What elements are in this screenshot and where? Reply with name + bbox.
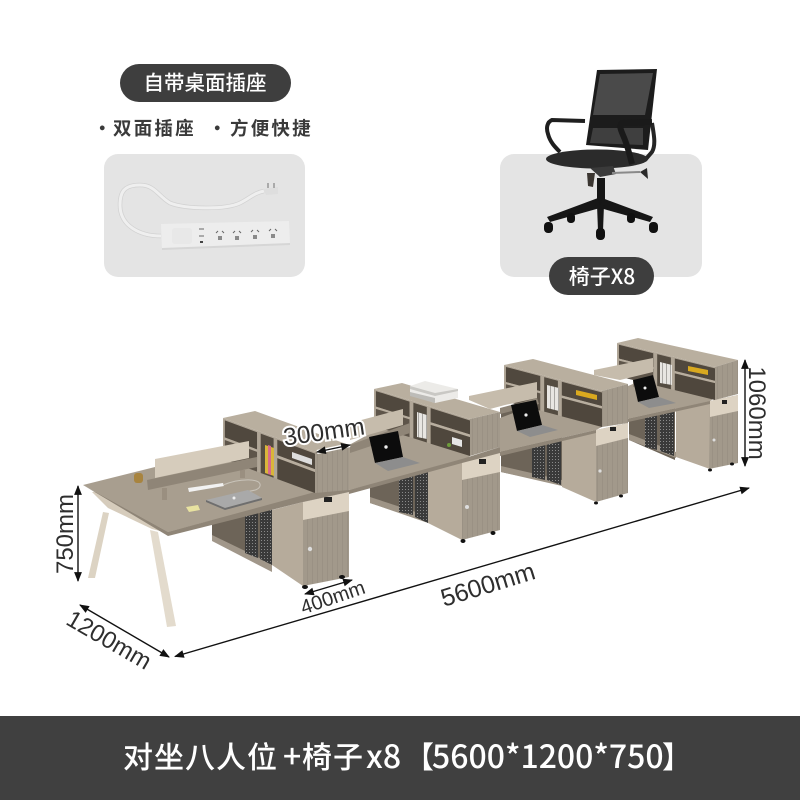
dimension: 400mm: 400mm <box>298 577 368 619</box>
footer title: 对坐八人位 <box>123 733 278 777</box>
desk unit 2 <box>349 381 500 543</box>
chair label pill <box>549 257 654 295</box>
footer title: 】 <box>662 733 692 777</box>
icon: desktop power strip <box>188 480 260 494</box>
dimension: 750mm: 750mm <box>52 494 79 574</box>
footer bar <box>0 716 800 800</box>
chair label pill: 椅子X8 <box>569 261 635 291</box>
icon: phone <box>186 505 200 512</box>
desk unit 4 <box>594 338 738 472</box>
icon: cup <box>134 473 143 483</box>
socket feature text: · <box>208 115 229 141</box>
footer title: 【 <box>404 733 434 777</box>
footer title: + <box>283 732 301 778</box>
socket feature text: · <box>93 115 114 141</box>
footer title: 椅子 <box>302 733 364 777</box>
icon: laptop <box>206 490 262 510</box>
socket heading pill <box>120 64 291 102</box>
icon: printer <box>410 381 458 403</box>
workstation row <box>83 338 738 627</box>
dimension: 1200mm: 1200mm <box>62 605 156 675</box>
icon: office chair <box>544 69 658 240</box>
footer title: 5600*1200*750 <box>432 732 664 778</box>
chair image panel <box>500 154 702 277</box>
panel: desktop socket <box>93 64 313 277</box>
socket feature text: 方便快捷 <box>230 115 313 141</box>
panel: chair <box>500 69 702 295</box>
icon: power strip <box>120 183 290 250</box>
privacy screen <box>147 441 257 500</box>
socket feature text: 双面插座 <box>113 115 196 141</box>
dimension: 5600mm: 5600mm <box>437 557 539 613</box>
desk unit 3 <box>469 359 628 504</box>
footer title: x8 <box>366 732 401 778</box>
socket image panel <box>104 154 305 277</box>
desk legs <box>88 512 176 627</box>
desk unit 1 <box>83 411 349 627</box>
dimension: 5600mm <box>175 488 749 656</box>
dimension: 300mm: 300mm <box>282 413 366 452</box>
socket heading pill: 自带桌面插座 <box>144 66 266 96</box>
dimension: 1060mm: 1060mm <box>743 366 770 460</box>
